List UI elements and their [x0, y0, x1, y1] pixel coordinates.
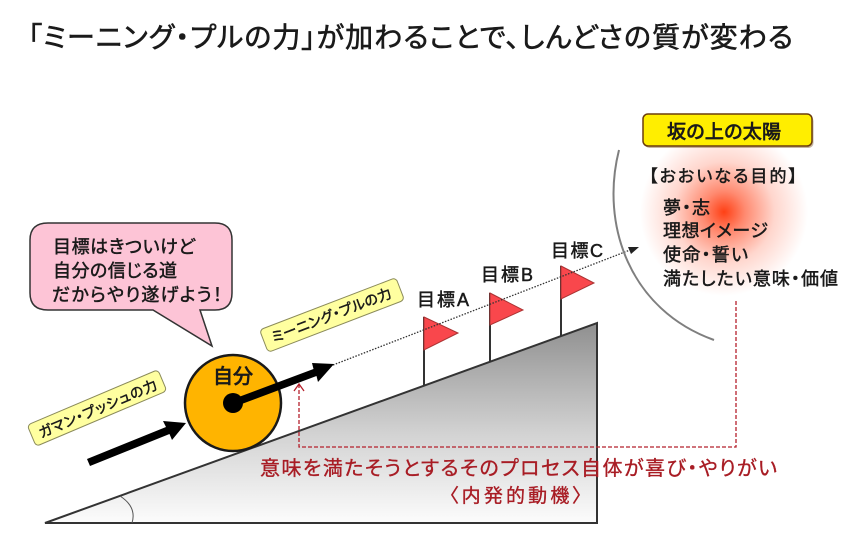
label: goal A: 目標A: [417, 290, 469, 310]
dotted arrow toward the sun: [333, 247, 639, 365]
text: purpose list: [663, 198, 838, 289]
text: great purpose: 【おおいなる目的】: [649, 167, 797, 186]
speech bubble: [30, 223, 232, 346]
circle: self: 自分: [213, 365, 253, 388]
slope: [45, 323, 597, 523]
text: purpose list: 理想イメージ: [663, 221, 768, 241]
arc: sun boundary: [614, 150, 714, 340]
speech bubble: だからやり遂げよう！: [52, 285, 222, 305]
speech bubble: 自分の信じる道: [53, 261, 177, 281]
label: meaning pull force: ミーニング・プルの力: [269, 285, 394, 345]
text: intrinsic motivation: 〈内発的動機〉: [449, 485, 582, 507]
pull arrow: [232, 363, 334, 406]
flag A: [424, 317, 458, 386]
speech bubble: 目標はきついけど: [53, 237, 196, 257]
text: process itself is the joy: 意味を満たそうとするそのプロセス自体が喜び・やりがい: [260, 457, 777, 480]
label: goal C: 目標C: [551, 241, 603, 261]
circle: self: [185, 355, 281, 451]
push arrow: [87, 421, 186, 466]
text: purpose list: 夢・志: [663, 198, 710, 218]
text: purpose list: 使命・誓い: [663, 245, 748, 265]
label: gaman push force: ガマン・プッシュの力: [36, 377, 159, 441]
text: purpose list: 満たしたい意味・価値: [663, 269, 838, 289]
flag C: [561, 266, 594, 336]
label: meaning pull force: [260, 278, 404, 352]
flag B: [490, 293, 523, 362]
heading: sun on the hill: [643, 114, 814, 148]
sun glow: [640, 128, 808, 296]
heading: sun on the hill: 坂の上の太陽: [667, 121, 781, 143]
title: 「ミーニング・プルの力」が加わることで、しんどさの質が変わる: [28, 22, 793, 53]
red dashed feedback arrow: [294, 301, 736, 447]
label: goal B: 目標B: [481, 265, 533, 285]
